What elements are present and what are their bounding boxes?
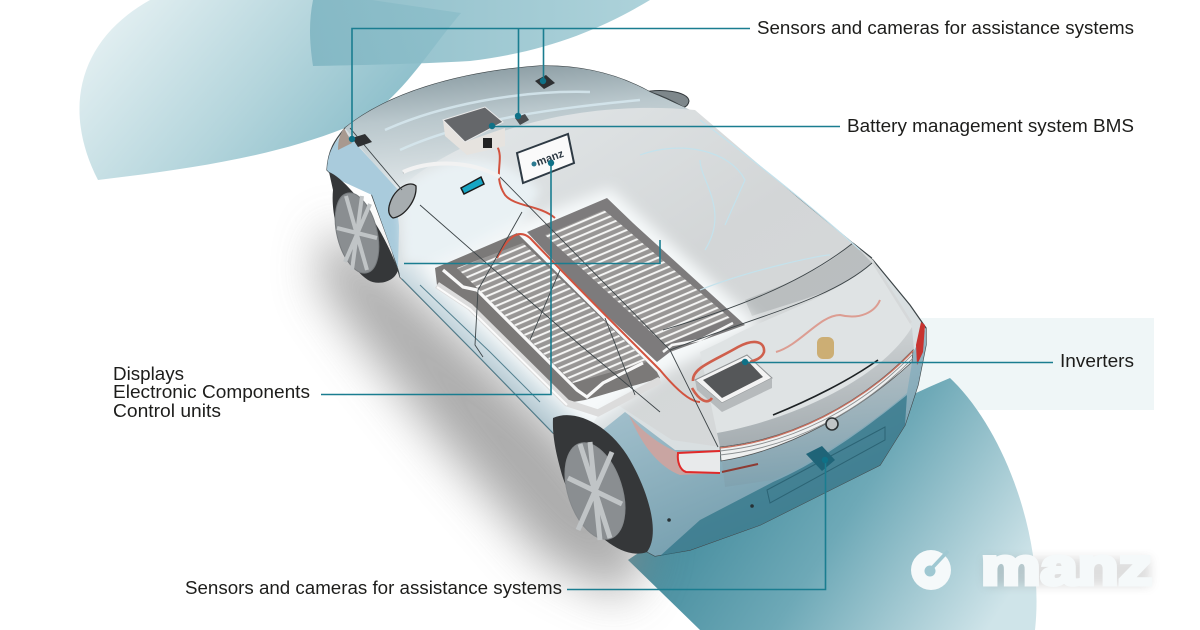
right mirror <box>640 91 689 108</box>
wiper <box>773 360 878 415</box>
dashboard screen <box>461 177 484 194</box>
display logo icon <box>532 162 536 166</box>
callout line: top sensors <box>352 28 750 139</box>
battery management system box <box>443 107 505 155</box>
background shape: top left swoosh <box>79 0 461 180</box>
windscreen wiper arc <box>403 164 500 177</box>
headlight <box>338 128 352 150</box>
rear light stripes <box>720 354 913 455</box>
label: inverters: Inverters <box>1060 351 1134 371</box>
background shape: inverter highlight panel <box>905 318 1154 410</box>
callout line: rear sensor <box>567 460 826 590</box>
label: rear sensors: Sensors and cameras for assistance systems <box>185 578 562 598</box>
trunk lid <box>717 327 914 447</box>
label: displays, electronic components, control units: Electronic Components <box>113 382 310 402</box>
rear interior cable <box>776 300 880 352</box>
sensor: left headlight <box>352 134 372 147</box>
battery white halo <box>425 188 760 425</box>
manz logo <box>911 538 1152 596</box>
rear sensor <box>806 446 835 471</box>
logo wordmark: manz <box>981 538 1152 596</box>
callout lines <box>321 28 1053 590</box>
inverter box <box>695 355 772 412</box>
logo shadow <box>985 558 1150 586</box>
rear panel <box>600 328 926 556</box>
lower boot panel <box>722 362 912 487</box>
display logo: manz <box>535 148 566 169</box>
hood <box>345 66 695 190</box>
high voltage cable along battery <box>497 146 700 402</box>
sensor: windshield <box>515 114 529 125</box>
emblem <box>826 418 838 430</box>
right tail light <box>916 322 925 365</box>
side sill <box>398 262 600 433</box>
left tail light <box>629 415 720 475</box>
inverter cables <box>692 342 764 401</box>
seat outlines <box>640 120 860 290</box>
rear teal overlap <box>660 395 907 556</box>
label: battery management: Battery management system BMS <box>847 116 1134 136</box>
background shape: bottom right swoosh <box>628 378 1037 630</box>
car illustration <box>327 66 926 556</box>
label: displays, electronic components, control units: Displays <box>113 364 184 384</box>
left tail light lens <box>678 451 720 473</box>
callout line: inverters <box>745 362 1053 364</box>
left mirror <box>389 184 416 218</box>
display panel <box>517 134 574 183</box>
cabin and roof glass <box>395 108 912 447</box>
coil spring <box>817 337 834 359</box>
callout dots <box>349 78 828 463</box>
red light strip <box>720 351 913 448</box>
ground shadow under car <box>318 225 650 600</box>
parking sensors <box>669 506 752 520</box>
license plate <box>767 427 885 503</box>
callout line: displays and components <box>321 163 660 394</box>
front fender <box>327 132 400 268</box>
roof band <box>745 243 872 316</box>
hood light blue highlight <box>385 92 640 150</box>
logo mark <box>911 550 951 590</box>
sill line <box>402 279 553 433</box>
background shape: top swoosh <box>310 0 650 66</box>
windscreen pale area <box>400 160 540 268</box>
battery pack: lower module <box>435 233 660 413</box>
label: top sensors: Sensors and cameras for assistance systems <box>757 18 1134 38</box>
battery pack: upper module <box>527 198 745 362</box>
front wheel <box>328 172 398 283</box>
rear wheel <box>553 415 653 554</box>
label: displays, electronic components, control units <box>113 364 310 421</box>
red lower strip <box>722 464 758 472</box>
sensor: front right <box>535 75 555 89</box>
car body base <box>327 66 926 556</box>
trunk interior <box>700 263 912 433</box>
callout line: BMS <box>492 126 840 128</box>
rear light bar <box>720 350 913 461</box>
a-pillars and door outlines <box>350 128 872 447</box>
label: displays, electronic components, control units: Control units <box>113 401 221 421</box>
